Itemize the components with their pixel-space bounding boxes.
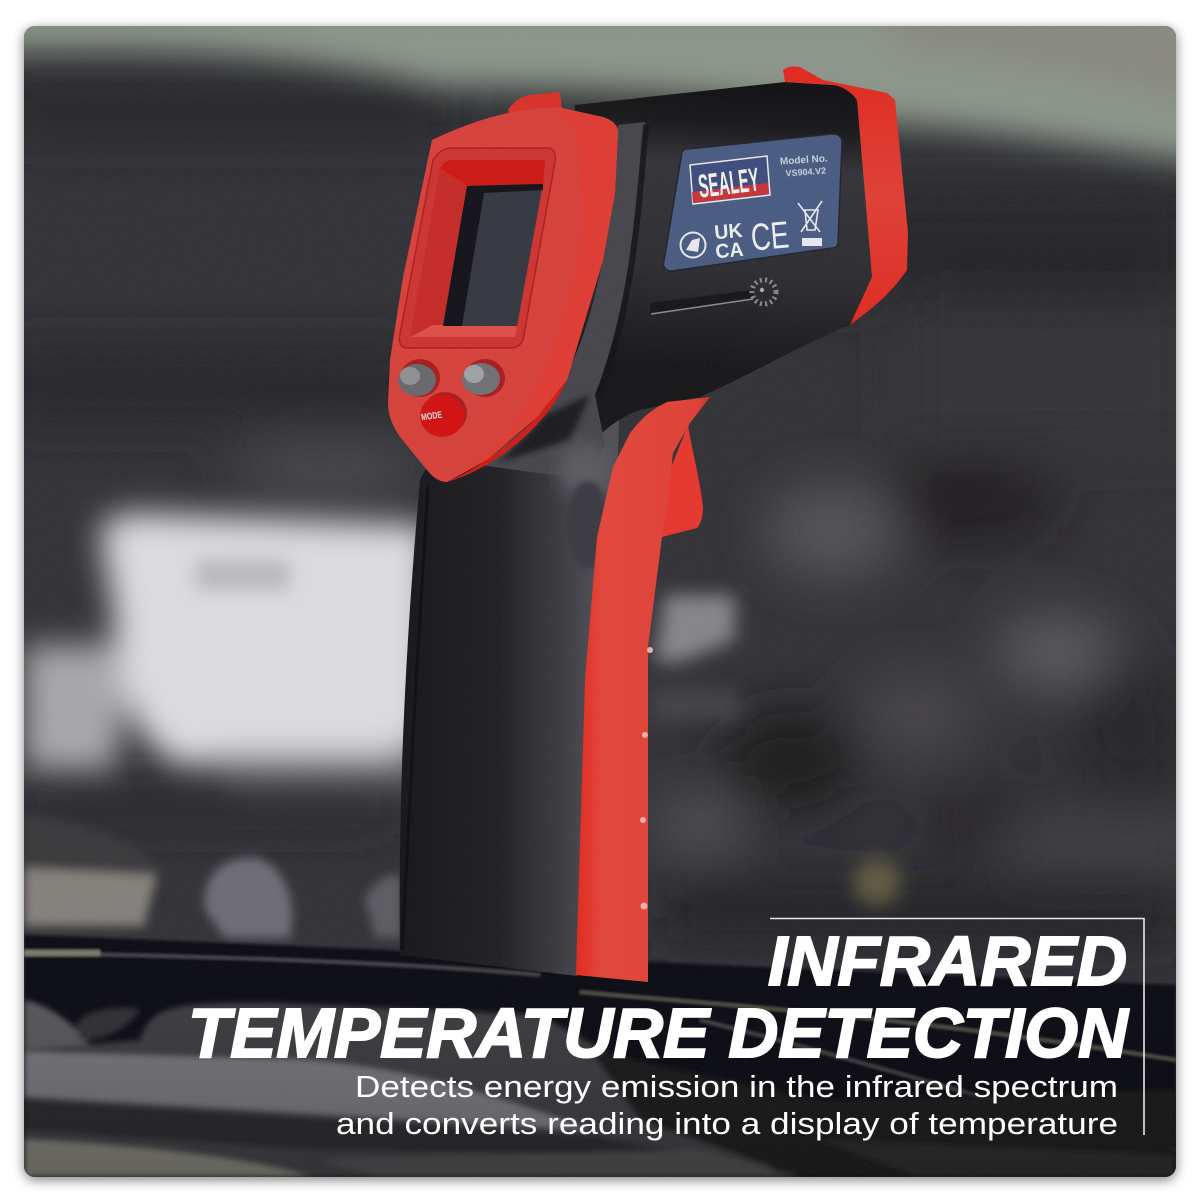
CE mark: CE	[749, 214, 791, 260]
trigger	[662, 425, 703, 537]
caption bracket frame	[770, 918, 1144, 1135]
model number: Model No.	[780, 153, 828, 168]
product: infrared thermometer gun	[388, 66, 908, 982]
heading line 1: INFRARED	[768, 922, 1127, 1000]
background: blurred dark shapes	[0, 85, 1200, 940]
mode button	[420, 392, 467, 437]
rear red cap	[783, 66, 908, 325]
screen frame	[399, 148, 555, 348]
trigger recess	[570, 480, 606, 568]
left button	[398, 359, 440, 397]
background: light top band	[24, 26, 1176, 180]
background: dark rim and lower parts	[24, 935, 1176, 1177]
grip highlight	[559, 442, 611, 498]
faceplate bevel highlight	[447, 110, 618, 482]
display screen	[443, 184, 543, 326]
housing groove	[598, 125, 646, 395]
shadow under faceplate	[500, 395, 590, 462]
background: lower left objects	[24, 815, 402, 938]
product label	[663, 134, 842, 271]
body text line 1: Detects energy emission in the infrared spectrum	[355, 1069, 1118, 1104]
front top red tab	[508, 92, 562, 113]
gun grip body	[400, 390, 620, 976]
UKCA mark: CA	[715, 239, 744, 263]
sensor slot and dial	[650, 280, 776, 314]
SEALEY badge: SEALEY	[696, 162, 761, 205]
caption block	[188, 922, 1129, 1141]
icon: manual read	[680, 232, 706, 258]
screen top recess	[440, 160, 545, 186]
bottom darkening	[24, 1000, 1176, 1177]
background: blob details	[195, 560, 901, 906]
model number	[780, 153, 828, 178]
heading line 2: TEMPERATURE DETECTION	[188, 994, 1129, 1072]
mode button: MODE	[420, 410, 443, 423]
grip seam	[402, 485, 428, 950]
body text line 2: and converts reading into a display of temperature	[336, 1106, 1118, 1141]
right button	[462, 359, 505, 397]
background: white blob	[24, 513, 430, 785]
red grip	[576, 397, 710, 982]
grip ridges	[640, 647, 653, 910]
UKCA mark: UK	[714, 220, 744, 244]
faceplate lower red edge	[447, 380, 567, 482]
housing side band beside faceplate	[480, 122, 645, 480]
icon: WEEE bin	[798, 201, 822, 246]
upper housing	[560, 82, 872, 435]
model number: VS904.V2	[785, 166, 826, 178]
screen inner lip	[410, 168, 467, 337]
front red faceplate	[388, 107, 618, 482]
UKCA mark	[714, 220, 744, 263]
